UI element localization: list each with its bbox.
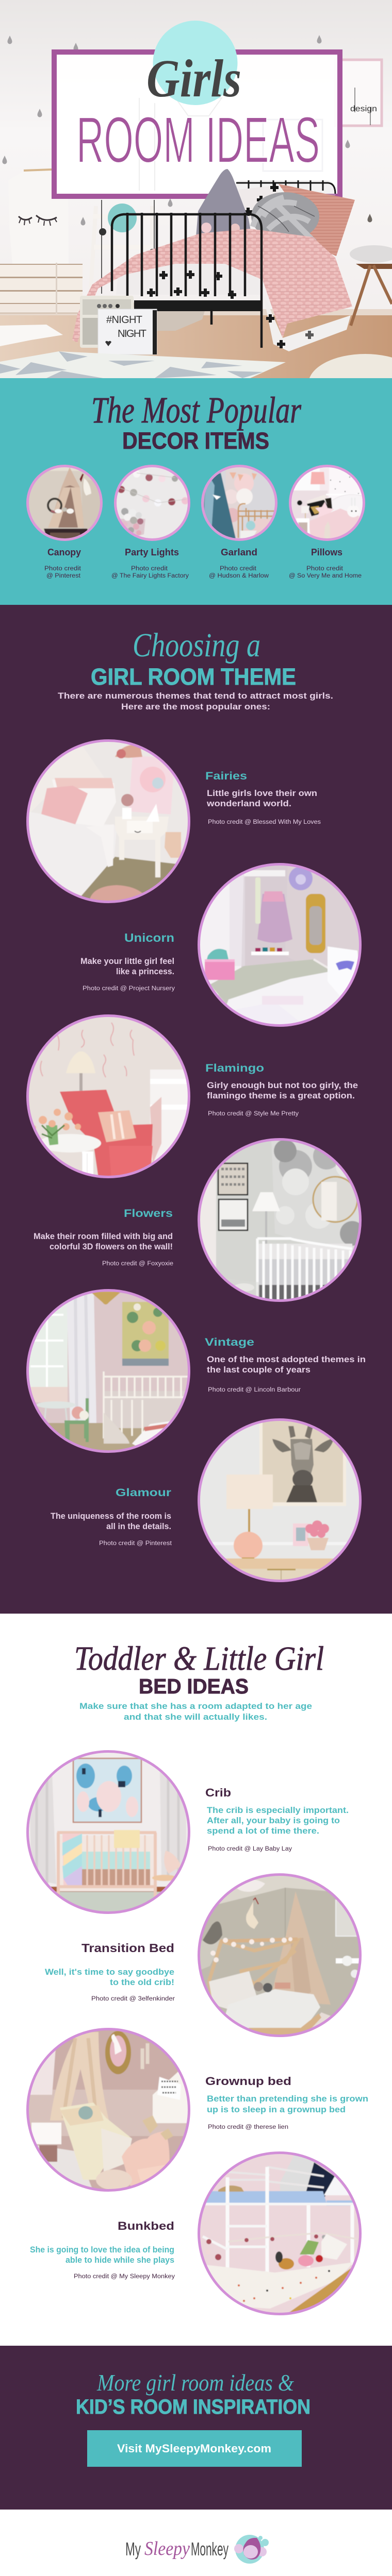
hero paper bag with sleepy eyes (18, 168, 57, 226)
heading: toddler and little girl bed ideas: BED IDEAS (139, 1674, 249, 1698)
bed text: transition bed (45, 1941, 175, 2002)
section background: purple themes (0, 605, 392, 1614)
photo: crib (26, 1750, 190, 1914)
theme text: unicorn: Photo credit @ Project Nursery (83, 986, 175, 992)
bed text: bunkbed: able to hide while she plays (66, 2256, 174, 2265)
bed text: bunkbed (30, 2219, 175, 2280)
theme text: fairies: Photo credit @ Blessed With My Loves (208, 819, 321, 825)
decor item: garland: @ Hudson & Harlow (209, 573, 269, 579)
bed text: grownup bed: Photo credit @ therese lien (208, 2124, 288, 2130)
theme text: fairies (205, 770, 321, 825)
decor item: canopy (44, 547, 81, 579)
theme text: glamour: Photo credit @ Pinterest (99, 1540, 172, 1547)
section background: teal (0, 378, 392, 605)
bed text: grownup bed (205, 2075, 368, 2130)
theme text: flowers: Make their room filled with big and (34, 1232, 173, 1241)
hero ladder and lights (99, 200, 155, 294)
theme text: vintage: the last couple of years (207, 1365, 311, 1375)
decor item: pillows: @ So Very Me and Home (289, 573, 362, 579)
bed text: crib: After all, your baby is going to (207, 1816, 340, 1825)
heading: choosing a girl room theme (58, 626, 333, 711)
section background: purple call to action (0, 2346, 392, 2510)
theme text: flamingo (205, 1062, 358, 1117)
photo: canopy (26, 465, 103, 541)
call to action heading (76, 2369, 311, 2418)
decor item: party lights: Photo credit (131, 566, 168, 572)
heading: the most popular decor items: The Most Popular (91, 389, 302, 431)
bed text: grownup bed: Better than pretending she is grown (207, 2094, 368, 2104)
theme text: vintage (205, 1336, 366, 1393)
bed text: transition bed: Transition Bed (81, 1941, 174, 1955)
theme text: glamour: all in the details. (106, 1522, 171, 1531)
logo wordmark: My (125, 2538, 141, 2560)
bed text: crib: Photo credit @ Lay Baby Lay (208, 1846, 292, 1852)
photo: vintage (26, 1289, 190, 1453)
theme text: flowers: Photo credit @ Foxyoxie (102, 1261, 173, 1267)
theme text: vintage: Photo credit @ Lincoln Barbour (208, 1387, 301, 1393)
heading: toddler and little girl bed ideas: Toddler & Little Girl (74, 1640, 324, 1677)
theme text: fairies: wonderland world. (206, 799, 291, 808)
photo: flowers (198, 1138, 365, 1303)
heading: toddler and little girl bed ideas (74, 1640, 324, 1722)
hero patterned rug (0, 351, 286, 378)
photo: pillows (289, 465, 365, 541)
decor item: garland: Photo credit (220, 566, 257, 572)
logo icon: sleeping monkey (234, 2535, 269, 2564)
call to action heading: More girl room ideas & (96, 2369, 294, 2396)
theme text: flowers (34, 1208, 173, 1267)
heading: choosing a girl room theme: Here are the most popular ones: (121, 702, 270, 711)
hero light box: night night: NIGHT (118, 328, 146, 340)
photo: garland (201, 465, 277, 541)
hero amplifier (80, 296, 134, 348)
photo: bunkbed (198, 2151, 362, 2315)
photo: transition bed (198, 1873, 362, 2037)
logo wordmark: Monkey (191, 2538, 228, 2560)
footer logo (125, 2535, 269, 2564)
theme text: fairies: Little girls love their own (207, 789, 317, 798)
decor item: pillows (289, 547, 362, 579)
theme text: flamingo: Flamingo (205, 1062, 264, 1074)
title frame (54, 52, 340, 196)
theme text: unicorn: Make your little girl feel (80, 957, 174, 966)
hero light box: night night: #NIGHT (106, 314, 142, 326)
decor item: canopy: @ Pinterest (46, 573, 81, 579)
theme text: flowers: Flowers (124, 1208, 173, 1219)
bed text: transition bed: to the old crib! (110, 1978, 174, 1987)
theme text: glamour: The uniqueness of the room is (51, 1512, 171, 1521)
theme text: unicorn: like a princess. (116, 967, 174, 976)
photo: grownup bed (26, 2028, 190, 2192)
hero picture frame: design (335, 60, 382, 126)
theme text: flamingo: Girly enough but not too girly, the (207, 1081, 358, 1090)
theme text: flamingo: flamingo theme is a great option. (207, 1091, 355, 1100)
bed text: grownup bed: Grownup bed (205, 2075, 291, 2088)
hero photo background: wall and floor (0, 0, 392, 378)
heading: toddler and little girl bed ideas: and that she will actually likes. (124, 1712, 267, 1722)
bed text: bunkbed: Photo credit @ My Sleepy Monkey (74, 2274, 175, 2280)
hero white crate (0, 263, 83, 313)
theme text: unicorn (80, 931, 175, 992)
bed text: bunkbed: She is going to love the idea of being (30, 2245, 174, 2255)
hero section (0, 0, 392, 414)
decor item: party lights: @ The Fairy Lights Factory (111, 573, 189, 579)
photo: unicorn (198, 863, 362, 1027)
logo wordmark (125, 2538, 228, 2560)
decor item: party lights: Party Lights (125, 547, 179, 557)
hero teal pompom (108, 204, 137, 232)
decor item: canopy: Canopy (47, 547, 81, 557)
decor item: party lights (111, 547, 189, 579)
theme text: unicorn: Unicorn (124, 931, 174, 944)
photo: fairies (26, 739, 190, 903)
decor item: garland: Garland (221, 547, 257, 557)
decor item: canopy: Photo credit (44, 566, 81, 572)
hero picture frame: design: design (350, 105, 377, 113)
logo wordmark: Sleepy (144, 2538, 190, 2560)
call to action heading: KID’S ROOM INSPIRATION (76, 2396, 311, 2418)
photo: glamour (198, 1418, 362, 1583)
heading: choosing a girl room theme: There are numerous themes that tend to attract most girls. (58, 691, 333, 701)
faint wall stickers seen through the frame (139, 98, 322, 191)
hero round rug (309, 354, 392, 378)
theme text: vintage: One of the most adopted themes in (207, 1355, 366, 1364)
bed text: grownup bed: up is to sleep in a grownup bed (207, 2105, 346, 2114)
title accent circle (153, 21, 237, 105)
theme text: vintage: Vintage (205, 1336, 254, 1348)
decor item: garland (209, 547, 269, 579)
bed text: crib: Crib (205, 1786, 231, 1799)
call to action button (87, 2430, 302, 2467)
heading: choosing a girl room theme: Choosing a (133, 626, 260, 664)
theme text: flowers: colorful 3D flowers on the wall! (50, 1242, 173, 1251)
bed text: crib (205, 1786, 349, 1852)
photo: flamingo (26, 1014, 190, 1178)
heading: the most popular decor items: DECOR ITEMS (122, 428, 269, 454)
theme text: glamour (51, 1487, 172, 1547)
hero bed and bedding (72, 169, 355, 351)
title: Girls: Girls (146, 49, 241, 108)
bed text: crib: The crib is especially important. (207, 1806, 349, 1815)
heading: toddler and little girl bed ideas: Make sure that she has a room adapted to her age (79, 1701, 312, 1711)
heading: choosing a girl room theme: GIRL ROOM THEME (91, 664, 296, 690)
bed text: transition bed: Photo credit @ 3elfenkinder (91, 1996, 175, 2002)
bed text: bunkbed: Bunkbed (118, 2219, 174, 2232)
hero light box: night night (98, 309, 157, 354)
bed text: crib: spend a lot of time there. (207, 1826, 319, 1836)
theme text: flamingo: Photo credit @ Style Me Pretty (208, 1111, 299, 1117)
call to action button: Visit MySleepyMonkey.com (117, 2442, 271, 2455)
decor item: pillows: Pillows (311, 547, 342, 557)
hero stool (350, 245, 392, 326)
theme text: glamour: Glamour (116, 1487, 171, 1499)
heading: the most popular decor items (91, 389, 302, 454)
decor item: pillows: Photo credit (306, 566, 344, 572)
photo: party lights (114, 465, 190, 541)
theme text: fairies: Fairies (205, 770, 247, 782)
bed text: transition bed: Well, it's time to say goodbye (45, 1968, 174, 1977)
